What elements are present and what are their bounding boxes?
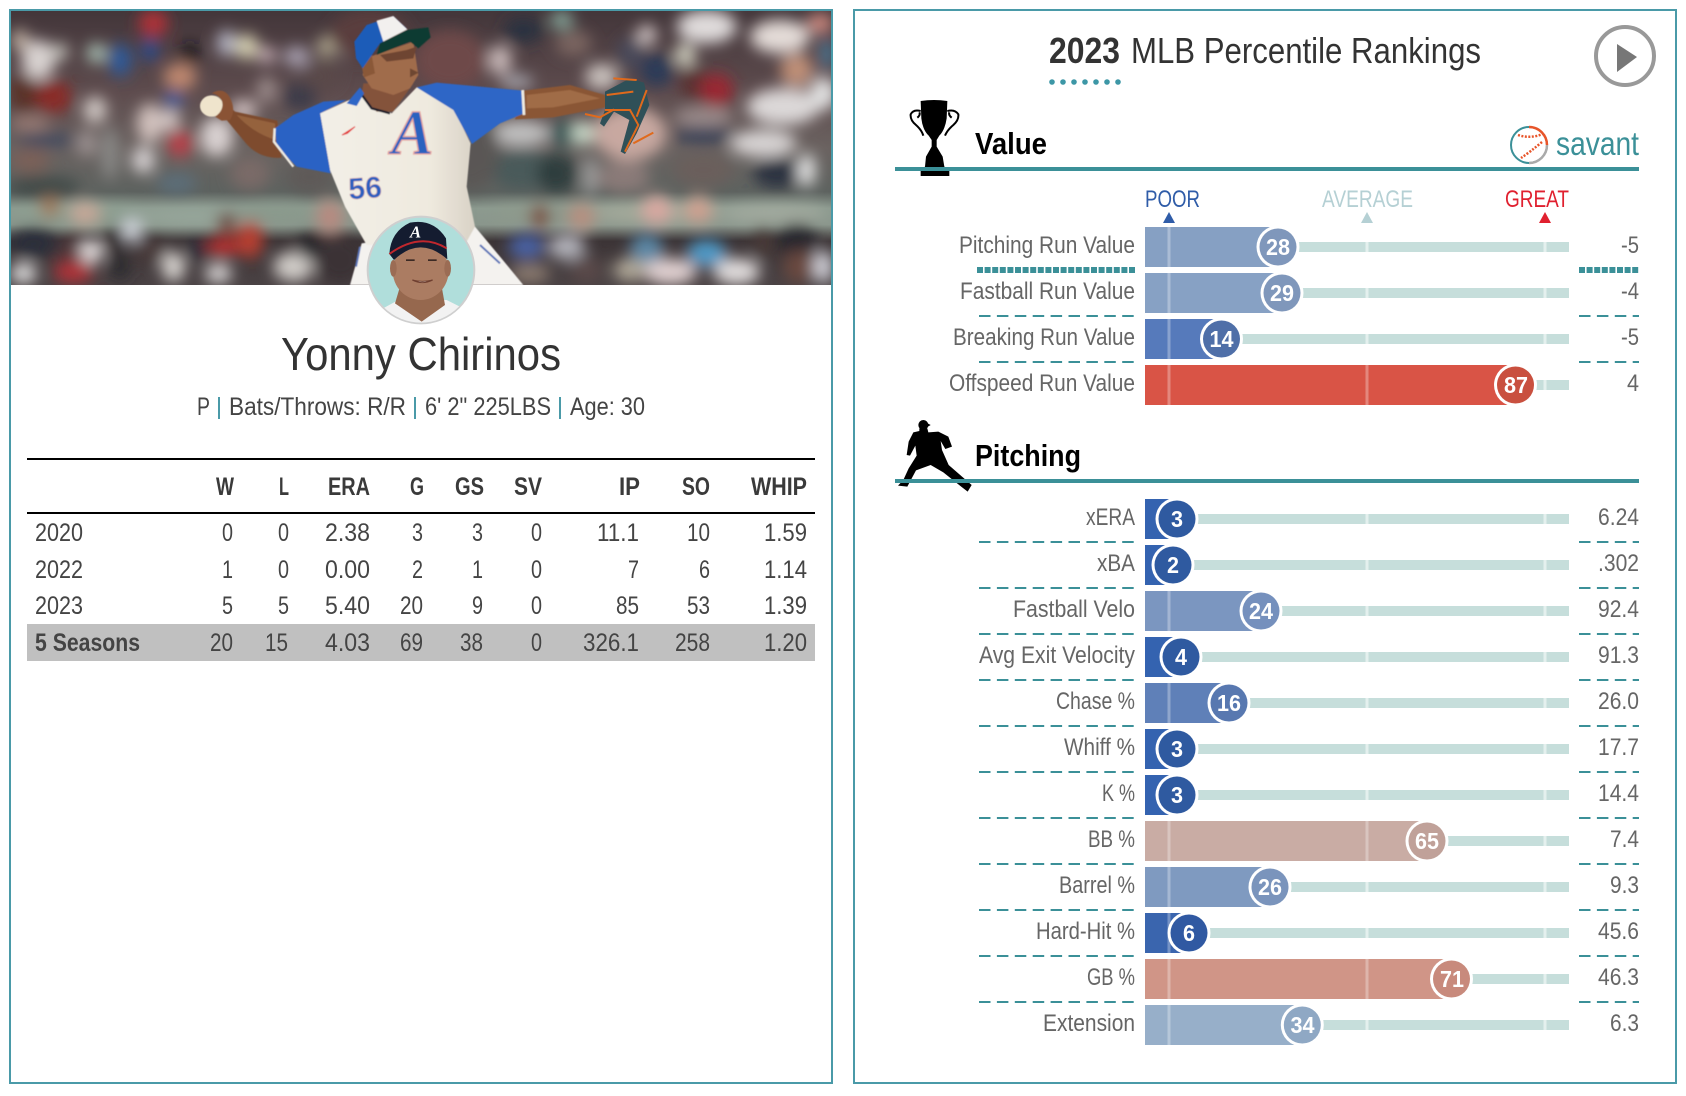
row 2022: 1	[222, 556, 233, 584]
right sleeve	[417, 83, 524, 144]
row: Chase % 16: Chase %	[1056, 688, 1135, 715]
row: Barrel % 26	[1059, 866, 1639, 908]
row: Hard-Hit % 6: 45.6	[1598, 918, 1639, 945]
value section rule	[895, 167, 1639, 171]
crowd behind the pitcher	[330, 9, 410, 61]
row 2023: 9	[472, 592, 483, 620]
banner photo: pitcher in front of crowd	[7, 9, 837, 285]
face	[363, 42, 418, 95]
row 2022: 7	[628, 556, 639, 584]
pitcher figure: 56	[347, 171, 383, 206]
row: K % 3	[1102, 774, 1639, 816]
face	[393, 247, 448, 300]
table header: W	[216, 473, 234, 501]
row: Avg Exit Velocity 4: 91.3	[1598, 642, 1639, 669]
divider: dense	[977, 267, 1639, 273]
pitcher figure: A	[387, 98, 434, 168]
right arm	[515, 85, 608, 119]
row 2022: 2022	[35, 556, 83, 584]
row: Breaking Run Value 14: 14	[1210, 326, 1234, 352]
row: Extension 34: 6.3	[1610, 1010, 1639, 1037]
row 2022	[35, 556, 807, 584]
row: Chase % 16: 16	[1217, 690, 1241, 716]
row: Offspeed Run Value 87	[949, 364, 1639, 406]
row 2023	[35, 592, 807, 620]
row: Avg Exit Velocity 4	[979, 636, 1639, 678]
row: Whiff % 3: Whiff %	[1064, 734, 1135, 761]
table header: ERA	[328, 473, 370, 501]
row 2020: 3	[472, 519, 483, 547]
row: Fastball Velo 24: Fastball Velo	[1013, 596, 1135, 623]
player headshot	[368, 217, 474, 327]
career stats table	[27, 458, 815, 661]
player bio line: Bats/Throws: R/R	[229, 393, 406, 421]
row 2020: 10	[687, 519, 710, 547]
row 2022: 1.14	[764, 556, 807, 584]
row: Offspeed Run Value 87: Offspeed Run Value	[949, 370, 1135, 397]
neck and collar	[362, 83, 413, 112]
row: Barrel % 26: 9.3	[1610, 872, 1639, 899]
row 5 seasons total: 20	[210, 629, 233, 657]
row: GB % 71: 71	[1440, 966, 1464, 992]
left arm	[223, 100, 282, 158]
row 2020	[35, 519, 807, 547]
savant logo: savant	[1556, 125, 1639, 162]
title dots	[1049, 79, 1121, 85]
table header: IP	[619, 473, 640, 501]
row: Avg Exit Velocity 4: Avg Exit Velocity	[979, 642, 1135, 669]
table header: SO	[682, 473, 710, 501]
row 2020: 0	[222, 519, 233, 547]
row: K % 3: 14.4	[1598, 780, 1639, 807]
row 2022: 2	[412, 556, 423, 584]
row 5 seasons total: 69	[400, 629, 423, 657]
row: Fastball Run Value 29	[960, 272, 1639, 314]
row: Pitching Run Value 28: -5	[1621, 232, 1639, 259]
row: Pitching Run Value 28: Pitching Run Value	[959, 232, 1135, 259]
row: xBA 2: xBA	[1097, 550, 1135, 577]
row: xBA 2: 2	[1167, 552, 1179, 578]
row: Barrel % 26: 26	[1258, 874, 1282, 900]
row 5 seasons total: 326.1	[583, 629, 639, 657]
row: Whiff % 3: 3	[1171, 736, 1183, 762]
row: Offspeed Run Value 87: 4	[1627, 370, 1639, 397]
row: BB % 65: BB %	[1088, 826, 1135, 853]
row: Chase % 16: 26.0	[1598, 688, 1639, 715]
row 2020: 3	[412, 519, 423, 547]
row: Extension 34: Extension	[1043, 1010, 1135, 1037]
row: Pitching Run Value 28: 28	[1266, 234, 1290, 260]
shirt	[384, 300, 459, 322]
row: Extension 34: 34	[1290, 1012, 1315, 1038]
navy cap	[389, 222, 447, 260]
row: Hard-Hit % 6: 6	[1183, 920, 1195, 946]
row: Breaking Run Value 14: -5	[1621, 324, 1639, 351]
row 2020: 2020	[35, 519, 83, 547]
title: 2023	[1049, 30, 1120, 71]
row: Hard-Hit % 6: Hard-Hit %	[1036, 918, 1135, 945]
row: Fastball Velo 24	[1013, 590, 1639, 632]
dividers: pitching section	[979, 542, 1639, 1002]
row 2020: 1.59	[764, 519, 807, 547]
heading: Pitching: Pitching	[975, 438, 1081, 473]
row: xERA 3: xERA	[1086, 504, 1135, 531]
jersey details	[342, 127, 355, 135]
row 2022: 0.00	[325, 556, 370, 584]
row: Extension 34	[1043, 1004, 1639, 1046]
panel: percentile rankings	[854, 10, 1676, 1083]
row 5 seasons total: 0	[531, 629, 542, 657]
icon: pitcher silhouette	[898, 420, 972, 492]
row: xBA 2	[1097, 544, 1639, 586]
row 2020: 0	[278, 519, 289, 547]
row: xERA 3	[1086, 498, 1639, 540]
row 2022: 0	[278, 556, 289, 584]
player headshot: A	[409, 222, 421, 241]
row 5 seasons total: 38	[460, 629, 483, 657]
row 2023: 5	[222, 592, 233, 620]
player bio line: P	[197, 393, 210, 421]
row 5 seasons total: 258	[675, 629, 710, 657]
row 2023: 20	[400, 592, 423, 620]
player name: Yonny Chirinos	[281, 328, 561, 380]
title continuation: MLB Percentile Rankings	[1131, 30, 1481, 71]
row: Fastball Run Value 29: -4	[1621, 278, 1639, 305]
row 2020: 11.1	[597, 519, 639, 547]
scale legend	[1145, 186, 1569, 223]
row 2023: 5.40	[325, 592, 370, 620]
row: Hard-Hit % 6	[1036, 912, 1639, 954]
row: BB % 65: 65	[1415, 828, 1439, 854]
row 2023: 53	[687, 592, 710, 620]
row: GB % 71: GB %	[1087, 964, 1135, 991]
row: Fastball Velo 24: 92.4	[1598, 596, 1639, 623]
table header: G	[410, 473, 424, 501]
scale legend: POOR	[1145, 186, 1200, 213]
icon: trophy	[911, 100, 958, 176]
table header: WHIP	[751, 473, 807, 501]
row: xBA 2: .302	[1598, 550, 1639, 577]
glove	[585, 78, 653, 154]
row: Fastball Run Value 29: Fastball Run Value	[960, 278, 1135, 305]
icon: play button	[1596, 27, 1654, 85]
row 5 seasons total: 15	[265, 629, 288, 657]
player bio line: Age: 30	[570, 393, 645, 421]
row: Fastball Velo 24: 24	[1249, 598, 1273, 624]
row: Fastball Run Value 29: 29	[1270, 280, 1294, 306]
row: BB % 65: 7.4	[1610, 826, 1639, 853]
row 5 seasons total	[35, 629, 807, 657]
scale legend: AVERAGE	[1322, 186, 1413, 213]
row: Chase % 16	[1056, 682, 1639, 724]
player bio line	[197, 393, 645, 421]
row 2022: 6	[699, 556, 710, 584]
row 2023: 1.39	[764, 592, 807, 620]
pitcher figure	[200, 16, 608, 285]
row 2023: 2023	[35, 592, 83, 620]
pitching section rule	[895, 479, 1639, 483]
row 5 seasons total: 5 Seasons	[35, 629, 140, 657]
dividers: value section	[979, 316, 1639, 362]
row: K % 3: K %	[1102, 780, 1135, 807]
row 2022: 1	[472, 556, 483, 584]
row 2022: 0	[531, 556, 542, 584]
row 2023: 0	[531, 592, 542, 620]
row 5 seasons total: 4.03	[325, 629, 370, 657]
player bio line: 6' 2" 225LBS	[425, 393, 551, 421]
row 5 seasons total: 1.20	[764, 629, 807, 657]
row 2023: 5	[278, 592, 289, 620]
table header: GS	[455, 473, 484, 501]
table header: L	[279, 473, 289, 501]
row: Barrel % 26: Barrel %	[1059, 872, 1135, 899]
row: Offspeed Run Value 87: 87	[1504, 372, 1528, 398]
row: GB % 71: 46.3	[1598, 964, 1639, 991]
row: GB % 71	[1087, 958, 1639, 1000]
row: Avg Exit Velocity 4: 4	[1175, 644, 1187, 670]
table header	[216, 473, 807, 501]
row: xERA 3: 6.24	[1598, 504, 1639, 531]
scale legend: GREAT	[1505, 186, 1569, 213]
row: Whiff % 3	[1064, 728, 1639, 770]
panel: player card	[7, 9, 837, 1083]
row 2020: 0	[531, 519, 542, 547]
row 2023: 85	[616, 592, 639, 620]
jersey torso	[320, 87, 475, 245]
row 2020: 2.38	[325, 519, 370, 547]
row: Breaking Run Value 14	[953, 318, 1639, 360]
row: xERA 3: 3	[1171, 506, 1183, 532]
row: Whiff % 3: 17.7	[1598, 734, 1639, 761]
pants	[350, 227, 523, 285]
row: Pitching Run Value 28	[959, 226, 1639, 268]
left sleeve	[275, 100, 347, 173]
row: Breaking Run Value 14: Breaking Run Value	[953, 324, 1135, 351]
table header: SV	[514, 473, 542, 501]
heading: Value: Value	[975, 126, 1047, 161]
row: K % 3: 3	[1171, 782, 1183, 808]
cap	[354, 16, 407, 68]
neck	[395, 287, 445, 322]
row: BB % 65	[1088, 820, 1639, 862]
savant logo	[1511, 125, 1639, 163]
